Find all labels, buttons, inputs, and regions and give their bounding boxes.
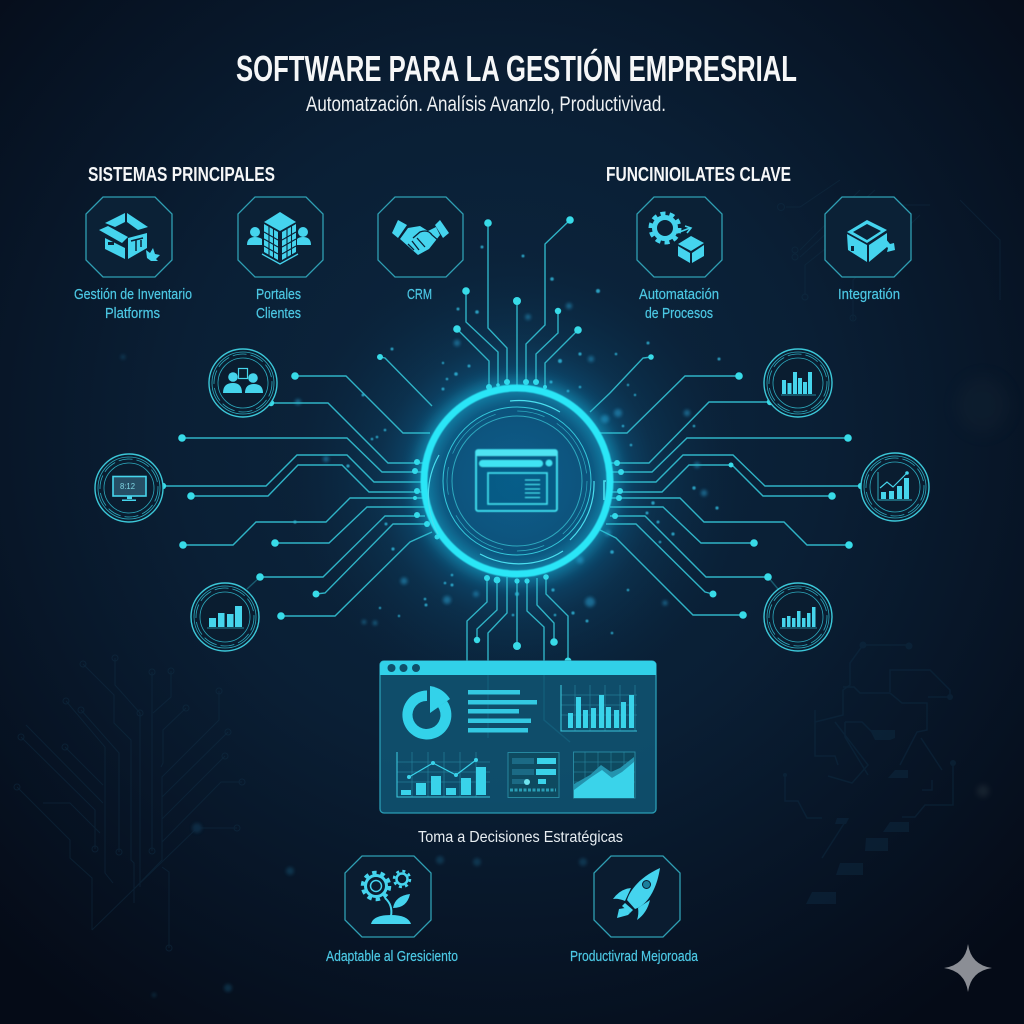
card: gestión de inventario (74, 197, 192, 322)
heading: funcionalidades clave: FUNCINIOILATES CLAVE (606, 164, 791, 186)
node: monitor (95, 454, 163, 522)
card: automatización (637, 197, 722, 322)
label: Productivrad Mejoroada (570, 948, 699, 965)
card: productividad (570, 856, 699, 965)
label line 2: de Procesos (645, 305, 713, 322)
central hub (424, 388, 610, 574)
faint circuit: top right (778, 180, 1000, 321)
node: bars right bottom (764, 583, 832, 651)
label: Adaptable al Gresiciento (326, 948, 458, 965)
node: trend chart (861, 453, 929, 521)
label: Gestión de Inventario (74, 286, 192, 303)
label: Integratión (838, 286, 900, 303)
icon: gears and plant (345, 856, 431, 937)
label line 2: Clientes (256, 305, 301, 322)
card: integración (825, 197, 911, 303)
circuit traces: top (453, 216, 582, 390)
donut chart (402, 686, 451, 739)
circuit traces: bottom (467, 574, 572, 742)
heading: sistemas principales: SISTEMAS PRINCIPALES (88, 164, 275, 186)
node: people (209, 349, 277, 417)
hub window icon (476, 450, 557, 511)
window header (380, 661, 656, 675)
faint circuit: bottom left (14, 655, 245, 951)
circuit traces: right (590, 354, 864, 619)
icon: gear and cube (637, 197, 722, 277)
icon: rocket (594, 856, 680, 937)
area chart (573, 752, 635, 798)
circuit traces: left (160, 354, 440, 620)
label line 2: Platforms (105, 305, 160, 322)
title: SOFTWARE PARA LA GESTIÓN EMPRESRIAL (236, 47, 797, 89)
label: CRM (407, 286, 432, 303)
text bars (468, 690, 537, 732)
card: crm (378, 197, 463, 303)
icon: handshake (378, 197, 463, 277)
faint circuit: bottom right (783, 642, 956, 904)
hub glow (424, 388, 610, 574)
dashboard panel (380, 661, 656, 813)
particles (120, 246, 720, 997)
card: adaptable (326, 856, 458, 965)
subtitle: Automatzación. Analísis Avanzlo, Productivivad. (306, 93, 666, 116)
icon: building and people (238, 197, 323, 277)
hub rings (424, 388, 610, 574)
node: bars right top (764, 349, 832, 417)
label: Portales (256, 286, 301, 303)
card: portales clientes (238, 197, 323, 322)
node: monitor: 8:12 (120, 482, 136, 491)
caption: toma de decisiones: Toma a Decisiones Estratégicas (418, 829, 623, 846)
node: bars left (191, 583, 259, 651)
combo chart bottom left (397, 752, 490, 797)
icon: sparkle watermark (944, 944, 992, 992)
icon: open box (86, 197, 172, 277)
bar chart top right (561, 685, 637, 731)
mini table (508, 752, 559, 798)
label: Automatación (639, 286, 719, 303)
icon: cube with arrow (825, 197, 911, 277)
